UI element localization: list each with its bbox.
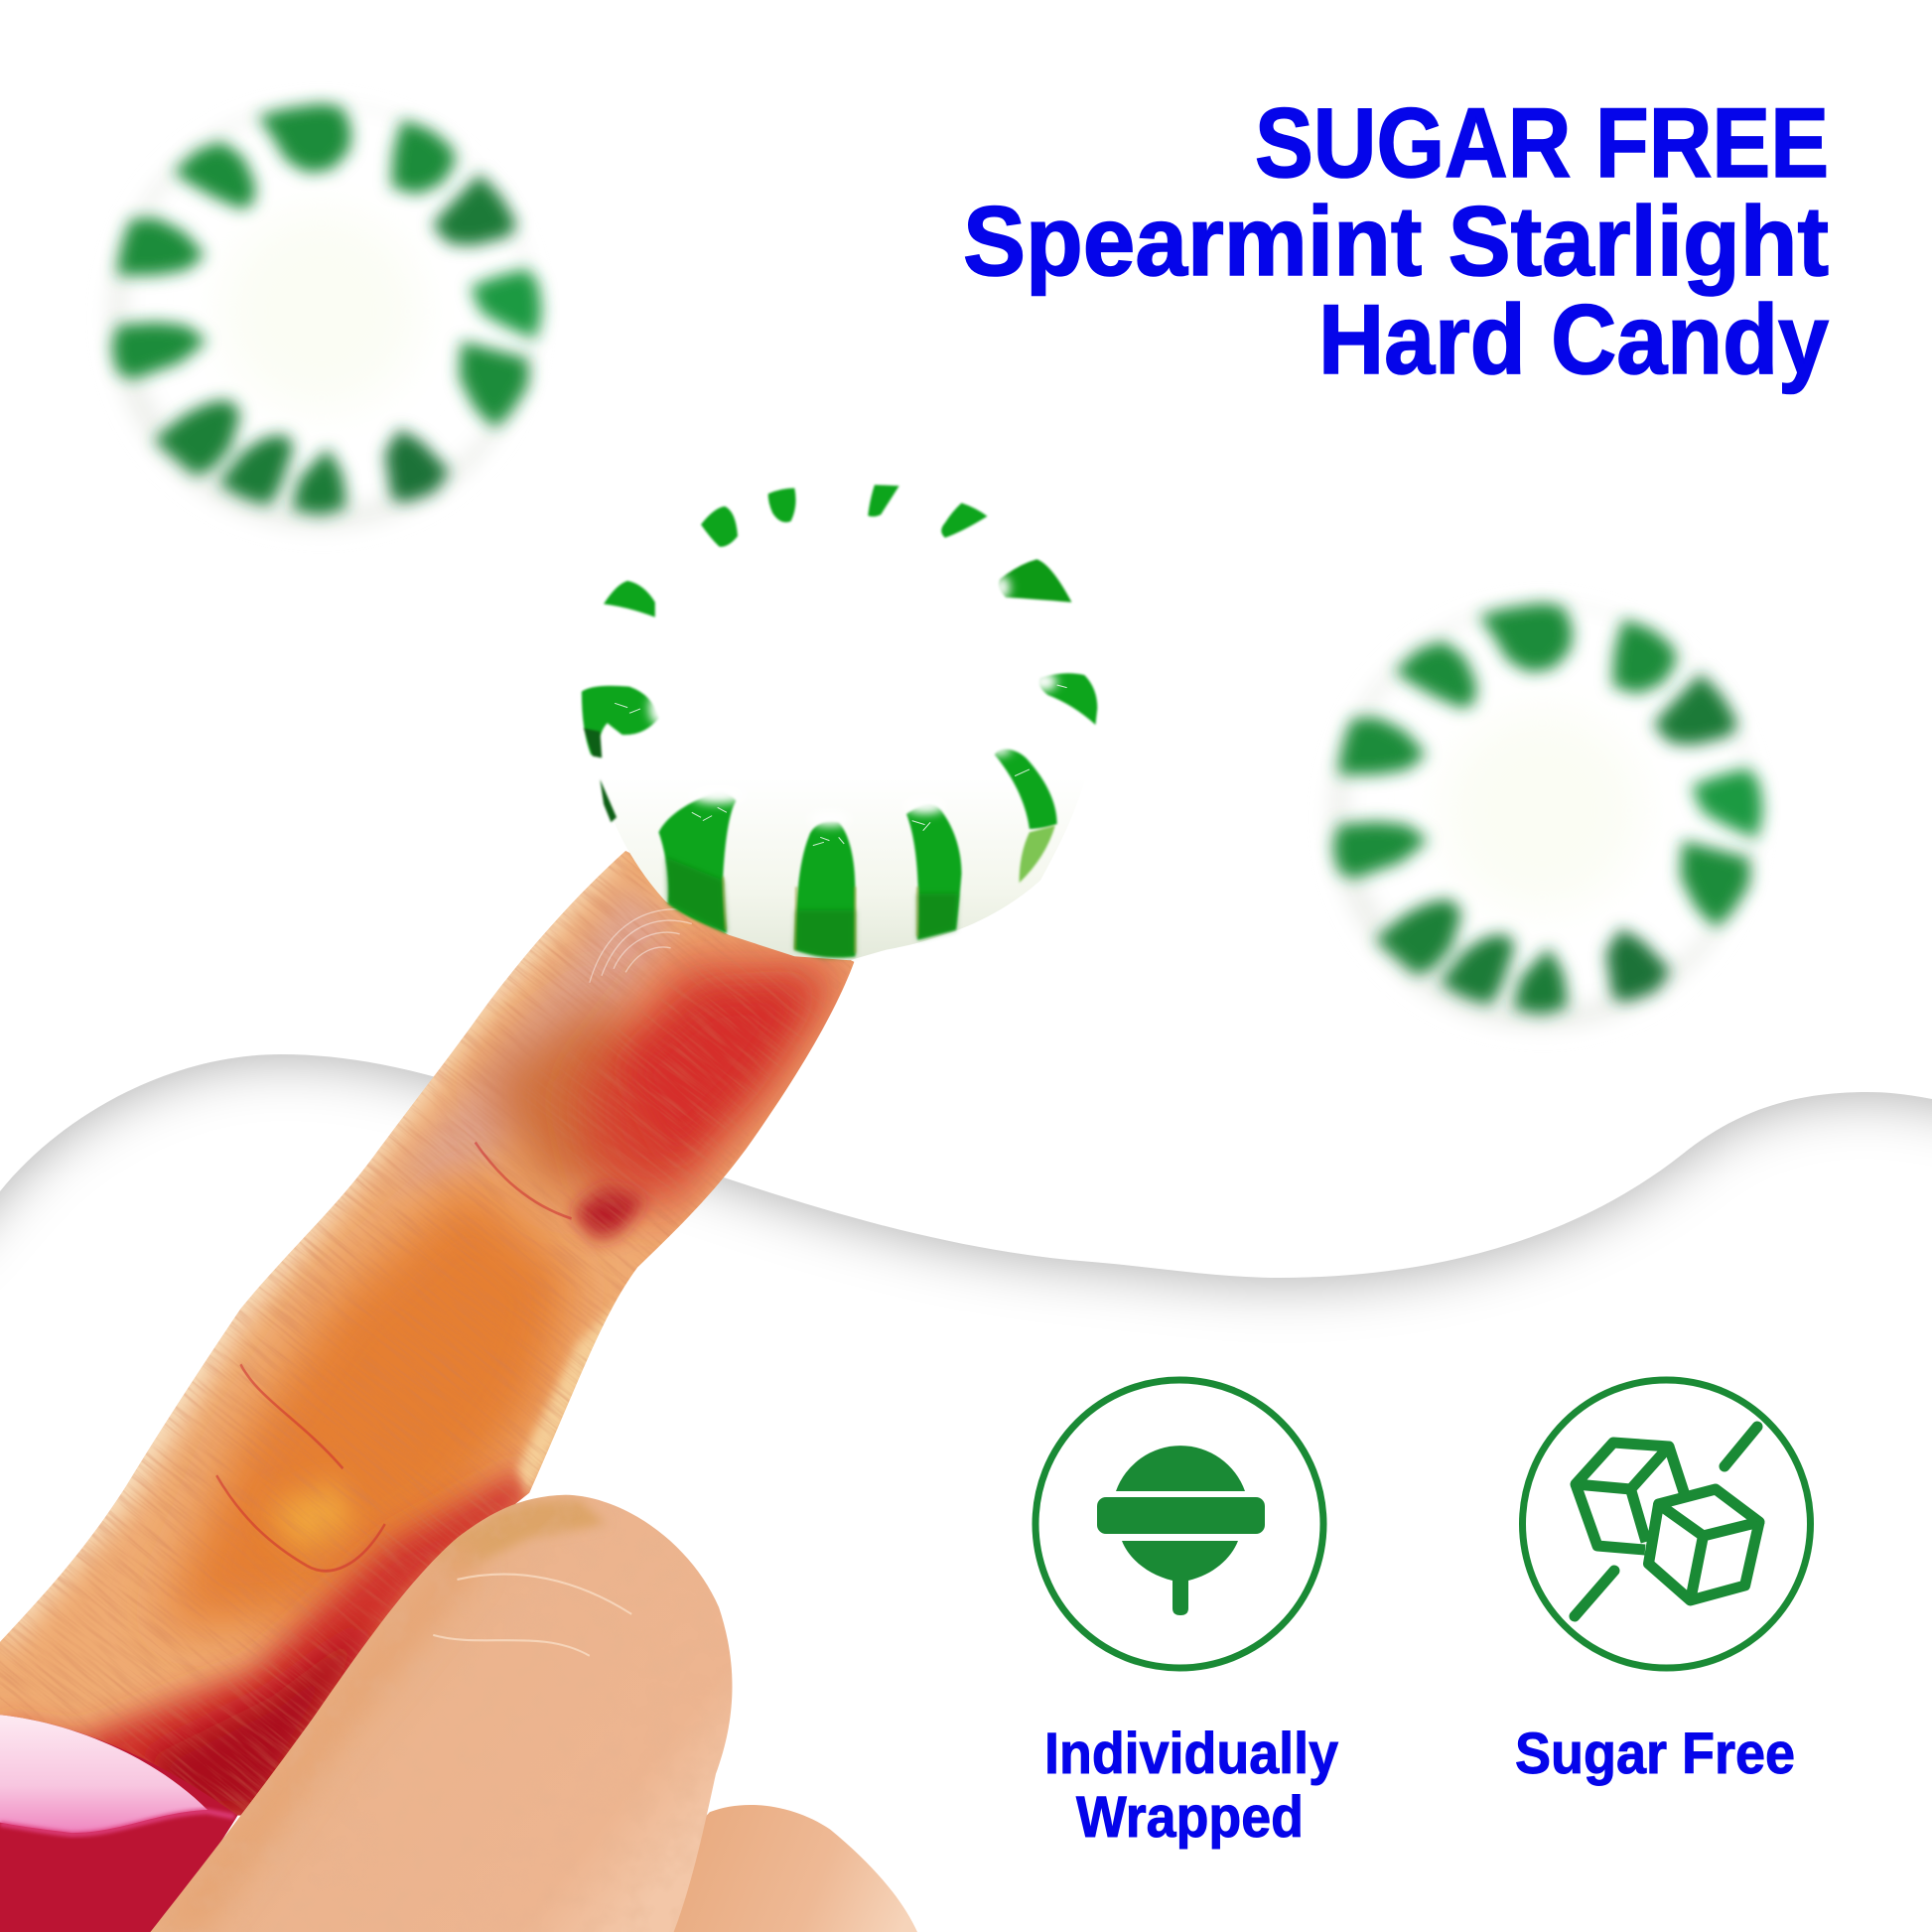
label: sugar free: Sugar Free: [1515, 1722, 1795, 1786]
index finger: [0, 851, 854, 1816]
middle finger: [144, 1489, 746, 1932]
wave divider with soft shadow: [0, 0, 1932, 1283]
title: Spearmint Starlight: [963, 186, 1829, 296]
candy body: [582, 480, 1097, 960]
feature: sugar free: [1515, 1380, 1811, 1786]
title: SUGAR FREE: [1255, 87, 1829, 198]
icon: crossed sugar cubes in circle: [1523, 1380, 1811, 1668]
blurred candy top left: [109, 102, 539, 529]
hand photo: fingers holding the candy: [0, 464, 963, 1932]
sharp candy on fingertip: [582, 480, 1097, 960]
blurred candy right: [1330, 602, 1760, 1029]
title: [963, 87, 1829, 394]
skin texture: [0, 852, 800, 1811]
candy stripe shading: [666, 857, 958, 958]
icon: lollipop in circle: [1035, 1380, 1323, 1668]
candy stripe olive edges: [723, 877, 917, 953]
title: Hard Candy: [1318, 284, 1829, 394]
feature: individually wrapped: [1035, 1380, 1338, 1850]
label: individually wrapped: [1044, 1722, 1338, 1850]
label: individually wrapped: Individually: [1044, 1722, 1338, 1786]
candy highlights: [649, 576, 1057, 826]
thumb nail: [0, 1715, 237, 1932]
label: individually wrapped: Wrapped: [1076, 1785, 1304, 1850]
candy stripes: [582, 484, 1097, 957]
ring finger: [649, 1805, 917, 1932]
